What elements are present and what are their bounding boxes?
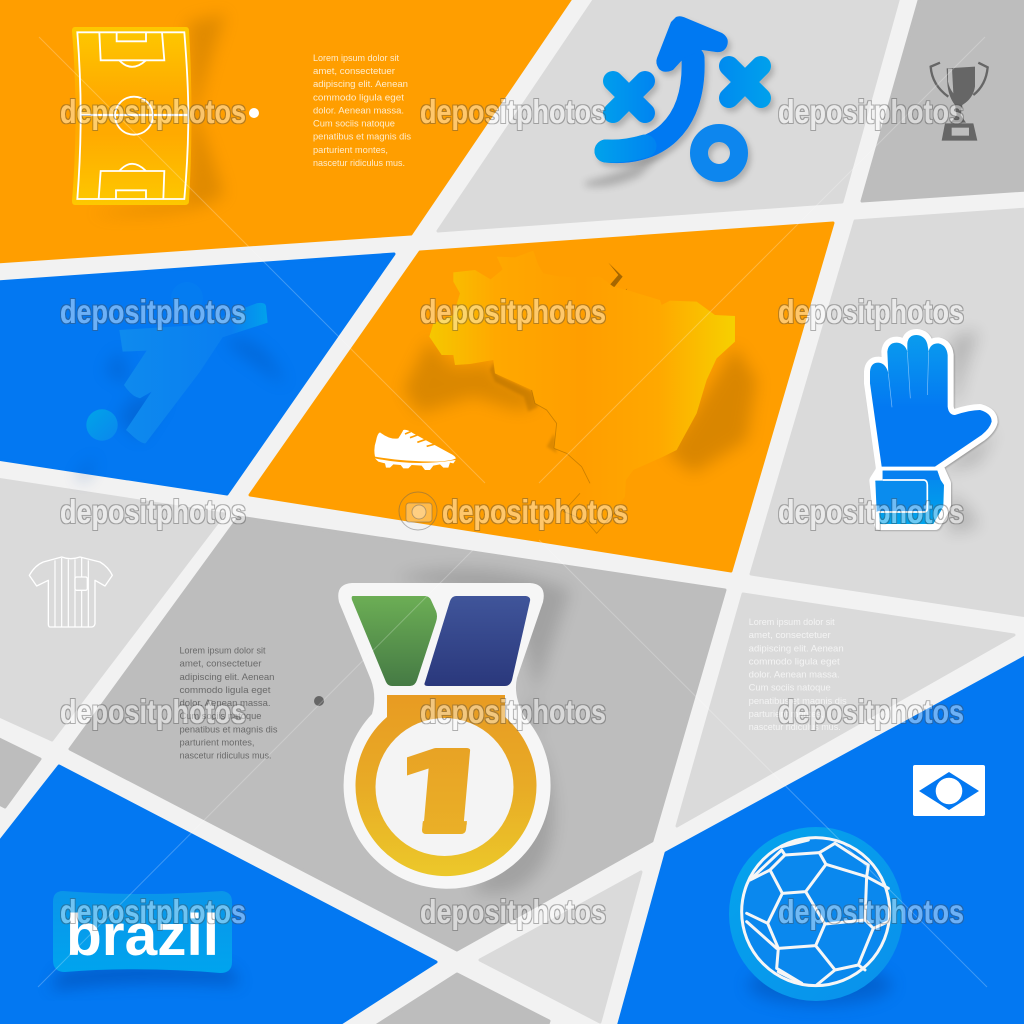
watermarks: depositphotos bbox=[60, 293, 246, 330]
panel: gray right bbox=[751, 209, 1024, 616]
text block: top: Lorem ipsum dolor sit bbox=[313, 53, 399, 63]
dot marker: white bbox=[249, 108, 259, 118]
panel: dark gray bottom bbox=[374, 974, 549, 1024]
text block: left: parturient montes, bbox=[180, 737, 254, 747]
text block: right: Lorem ipsum dolor sit bbox=[749, 617, 835, 627]
icon: referee shirt bbox=[29, 557, 112, 627]
text block: top: commodo ligula eget bbox=[313, 92, 404, 102]
tactics arrow bbox=[606, 16, 728, 152]
soccer ball icon bbox=[729, 827, 903, 1005]
medal sticker bbox=[338, 569, 570, 894]
panel: light gray bottom bbox=[480, 872, 641, 1022]
panel: dark gray top right bbox=[862, 0, 1024, 201]
tactics icon bbox=[585, 16, 761, 187]
text block: left: dolor. Aenean massa. bbox=[180, 698, 270, 708]
watermarks: depositphotos bbox=[778, 693, 964, 730]
medal white backing bbox=[338, 583, 551, 889]
watermarks: depositphotos bbox=[420, 693, 606, 730]
watermarks: depositphotos bbox=[420, 93, 606, 130]
medal gold disc bbox=[356, 695, 536, 876]
panel: blue lower left bbox=[0, 766, 436, 1024]
panel: gray top centre bbox=[438, 0, 899, 231]
watermarks: depositphotos bbox=[60, 493, 246, 530]
text block: left bbox=[180, 646, 278, 761]
glove hand bbox=[870, 335, 992, 524]
icon: Brazil flag bbox=[913, 765, 985, 816]
tactics circle bbox=[699, 133, 739, 173]
watermarks: depositphotos bbox=[60, 893, 246, 930]
watermarks: depositphotos bbox=[778, 93, 964, 130]
text block: top: penatibus et magnis dis bbox=[313, 132, 411, 142]
player head bbox=[171, 282, 203, 314]
watermarks bbox=[60, 93, 964, 930]
medal green ribbon bbox=[352, 596, 437, 686]
text block: top: parturient montes, bbox=[313, 145, 388, 155]
text block: top bbox=[313, 53, 411, 168]
text block: right: penatibus et magnis dis bbox=[749, 696, 847, 706]
brazil label sticker bbox=[50, 891, 240, 990]
text block: left: penatibus et magnis dis bbox=[180, 724, 278, 734]
watermarks: depositphotos bbox=[442, 493, 628, 530]
tactics cross left bbox=[613, 81, 645, 113]
panel: blue lower right bbox=[618, 656, 1024, 1024]
text block: right: dolor. Aenean massa. bbox=[749, 670, 840, 680]
watermarks: depositphotos bbox=[60, 93, 246, 130]
panel: orange top left bbox=[0, 0, 572, 262]
text block: left: amet, consectetuer bbox=[180, 659, 262, 669]
brazil word: brazil bbox=[66, 903, 219, 968]
text block: right: nascetur ridiculus mus. bbox=[749, 722, 841, 732]
text block: top: dolor. Aenean massa. bbox=[313, 105, 404, 115]
text block: right: Cum sociis natoque bbox=[749, 683, 831, 693]
text block: right: amet, consectetuer bbox=[749, 630, 831, 640]
text block: left: adipiscing elit. Aenean bbox=[180, 672, 274, 682]
football pitch sticker bbox=[72, 14, 226, 215]
medal blue ribbon bbox=[424, 596, 530, 686]
tactics cross right bbox=[729, 66, 761, 98]
text block: left: Lorem ipsum dolor sit bbox=[180, 646, 266, 656]
panel: light gray left bbox=[0, 479, 224, 740]
panel: blue left bbox=[0, 254, 394, 494]
player ball bbox=[86, 409, 118, 441]
icon: trophy bbox=[931, 63, 988, 141]
watermarks: depositphotos bbox=[420, 893, 606, 930]
panel: orange centre bbox=[250, 223, 833, 571]
Brazil map bbox=[403, 251, 757, 533]
watermarks: depositphotos bbox=[778, 493, 964, 530]
glove cuff bbox=[875, 471, 944, 524]
panel: small gray left bbox=[0, 738, 40, 807]
watermarks: depositphotos bbox=[60, 693, 246, 730]
glove sticker bbox=[870, 331, 997, 533]
watermarks: depositphotos bbox=[778, 293, 964, 330]
text block: top: Cum sociis natoque bbox=[313, 119, 395, 129]
text block: top: nascetur ridiculus mus. bbox=[313, 158, 405, 168]
icon: watermark camera bbox=[399, 492, 437, 530]
player body bbox=[119, 303, 268, 443]
text block: top: amet, consectetuer bbox=[313, 66, 395, 76]
panel: dark gray centre bbox=[70, 517, 725, 950]
text block: top: adipiscing elit. Aenean bbox=[313, 79, 408, 89]
icon: football boot bbox=[374, 430, 456, 470]
medal number: 1 bbox=[370, 723, 512, 863]
watermarks: depositphotos bbox=[778, 893, 964, 930]
text block: left: Cum sociis natoque bbox=[180, 711, 262, 721]
player icon bbox=[75, 282, 285, 480]
text block: left: commodo ligula eget bbox=[180, 685, 271, 695]
text block: left: nascetur ridiculus mus. bbox=[180, 751, 272, 761]
panel: light gray right middle bbox=[677, 594, 1014, 826]
text block: right: adipiscing elit. Aenean bbox=[749, 643, 844, 653]
text block: right bbox=[749, 617, 847, 732]
text block: right: parturient montes, bbox=[749, 709, 824, 719]
dot marker: gray bbox=[314, 696, 324, 706]
text block: right: commodo ligula eget bbox=[749, 656, 840, 666]
watermarks: depositphotos bbox=[420, 293, 606, 330]
